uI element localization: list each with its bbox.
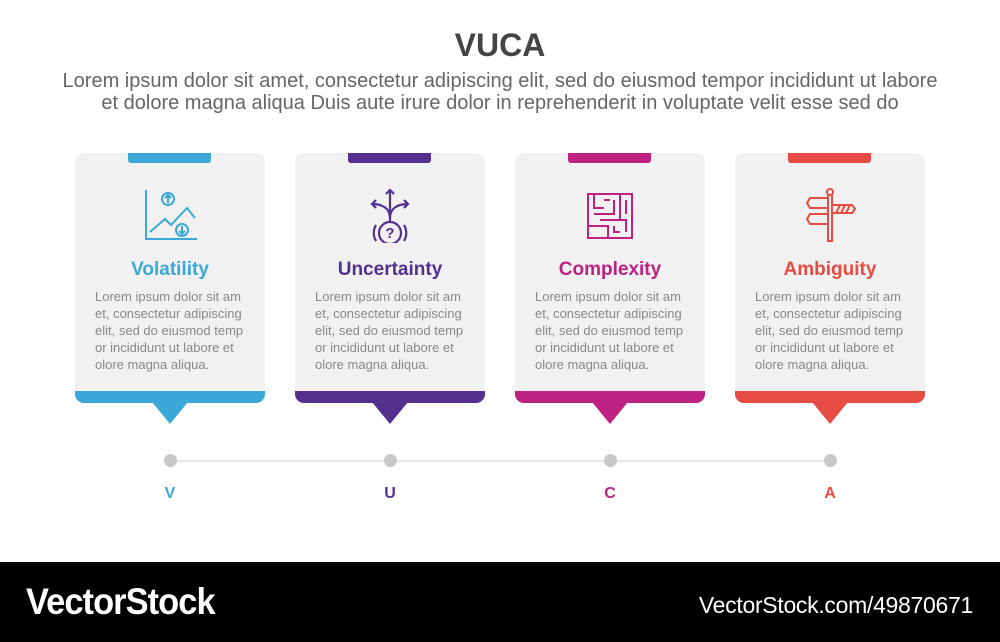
heading: Complexity <box>559 259 661 280</box>
panel: volatility <box>75 153 265 424</box>
text: elit, sed do eiusmod temp <box>315 323 463 338</box>
footer url: VectorStock.com/49870671 <box>699 592 973 618</box>
letter V: V <box>165 485 175 502</box>
letter C: C <box>604 485 616 502</box>
subtitle: et dolore magna aliqua Duis aute irure dolor in reprehenderit in voluptate velit esse sed do <box>101 92 899 114</box>
text <box>95 289 243 372</box>
text: elit, sed do eiusmod temp <box>535 323 683 338</box>
text: or incididunt ut labore et <box>535 340 674 355</box>
text: elit, sed do eiusmod temp <box>95 323 243 338</box>
heading: Uncertainty <box>338 259 442 280</box>
text: et, consectetur adipiscing <box>535 306 682 321</box>
panel: complexity <box>515 153 705 424</box>
panel: uncertainty <box>295 153 485 424</box>
letter U: U <box>384 485 396 502</box>
text: Lorem ipsum dolor sit am <box>315 289 461 304</box>
panel: ambiguity <box>735 153 925 424</box>
text: Lorem ipsum dolor sit am <box>755 289 901 304</box>
dot: V <box>164 454 177 467</box>
heading: Ambiguity <box>784 259 876 280</box>
text <box>535 289 683 372</box>
text: or incididunt ut labore et <box>95 340 234 355</box>
icon: maze <box>587 193 633 239</box>
footer logo: VectorStock <box>26 581 215 622</box>
text <box>755 289 903 372</box>
timeline <box>164 454 837 502</box>
text: olore magna aliqua. <box>315 357 429 372</box>
heading: Volatility <box>131 259 209 280</box>
text: Lorem ipsum dolor sit am <box>95 289 241 304</box>
text: olore magna aliqua. <box>535 357 649 372</box>
text: Lorem ipsum dolor sit am <box>535 289 681 304</box>
text <box>315 289 463 372</box>
icon: uncertainty: ? <box>385 225 395 242</box>
dot: U <box>384 454 397 467</box>
icon: signpost <box>806 188 856 242</box>
text: et, consectetur adipiscing <box>95 306 242 321</box>
text: et, consectetur adipiscing <box>315 306 462 321</box>
text: olore magna aliqua. <box>755 357 869 372</box>
text: or incididunt ut labore et <box>315 340 454 355</box>
subtitle <box>63 70 937 114</box>
dot: C <box>604 454 617 467</box>
icon: volatility chart <box>145 190 197 240</box>
text: or incididunt ut labore et <box>755 340 894 355</box>
text: olore magna aliqua. <box>95 357 209 372</box>
letter A: A <box>824 485 836 502</box>
dot: A <box>824 454 837 467</box>
icon: uncertainty <box>370 188 410 243</box>
text: elit, sed do eiusmod temp <box>755 323 903 338</box>
title: VUCA <box>455 27 545 63</box>
subtitle: Lorem ipsum dolor sit amet, consectetur adipiscing elit, sed do eiusmod tempor incididunt ut labore <box>63 70 937 92</box>
footer <box>0 562 1000 642</box>
text: et, consectetur adipiscing <box>755 306 902 321</box>
